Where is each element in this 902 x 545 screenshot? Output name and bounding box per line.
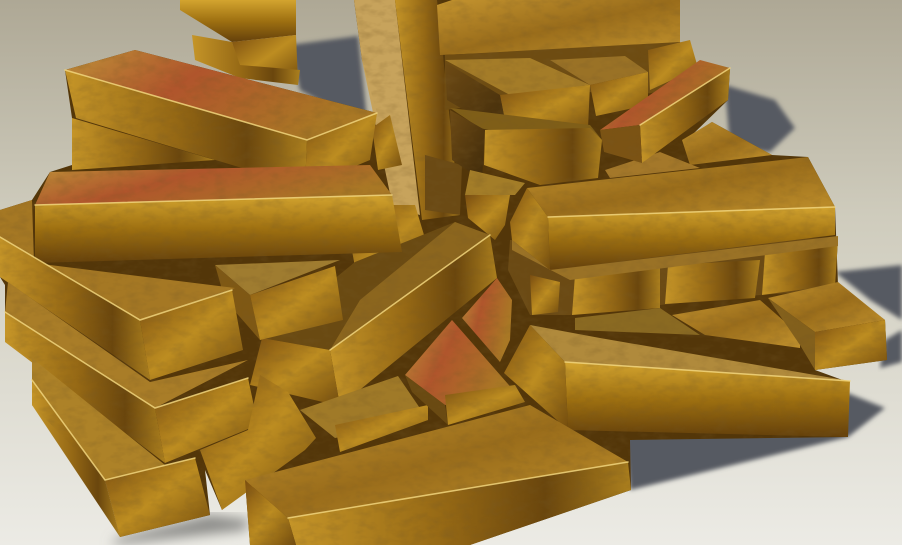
gold bar: small bar under long bar [215, 260, 343, 340]
specular edge highlights [0, 68, 850, 518]
gold bar: small middle bar behind centre [350, 205, 430, 283]
gold bar: top left bar [65, 50, 377, 187]
gold bar: right small bar [768, 282, 887, 370]
gold bar: left stack middle [5, 282, 258, 463]
gold bar: long diagonal bar [250, 222, 497, 406]
gold bar: right long bar [510, 157, 835, 270]
gold bar: centre bar wedge [462, 278, 512, 362]
gold bar: left stack upper [0, 200, 243, 380]
gold bars: small bars at lower centre [200, 320, 525, 510]
gold bars: back right stack [437, 0, 730, 185]
gold bar: small bar behind centre [465, 170, 525, 240]
gold bar: behind top-left bar [72, 115, 402, 170]
gold bar: left stack lower [32, 358, 210, 537]
gold bar: large front right bar [504, 325, 850, 437]
gold bar: bottom centre bar [245, 405, 631, 545]
gold bar: middle row strip under right long bar [512, 236, 838, 280]
gold bar: far right small bar [605, 122, 772, 178]
gold bars: back left stack [180, 0, 300, 85]
gold bar: long front bar at upper left [35, 165, 402, 263]
gold bars: right row of small bars [508, 238, 838, 348]
gold bar: upright bar [354, 0, 462, 220]
